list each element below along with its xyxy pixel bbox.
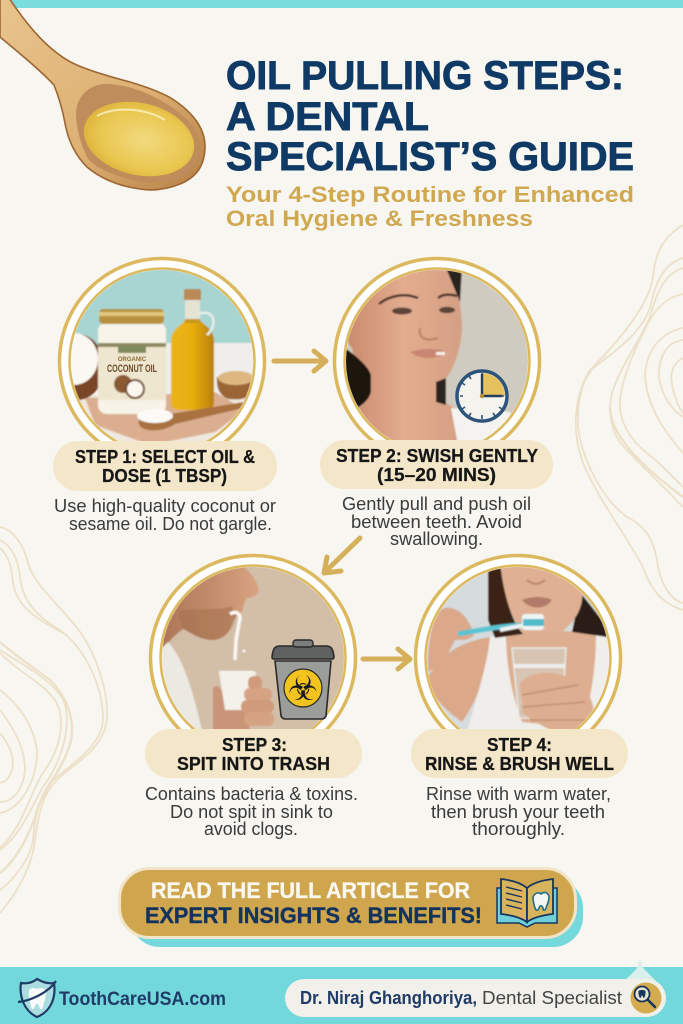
subtitle: Oral Hygiene & Freshness: [226, 206, 533, 231]
arrow: step 3 to step 4: [363, 649, 410, 669]
title: OIL PULLING STEPS:: [226, 54, 624, 98]
icon: biohazard trash bin: ☣: [288, 669, 318, 709]
photo: woman swishing with clock: [346, 270, 528, 440]
step 4 description: [426, 784, 611, 839]
step 3 label pill: STEP 3:: [222, 735, 287, 755]
step 1 description: sesame oil. Do not gargle.: [69, 514, 272, 534]
step 1 description: Use high-quality coconut or: [54, 496, 276, 516]
title: [226, 54, 634, 179]
step 3 description: avoid clogs.: [204, 819, 298, 839]
photo: woman brushing with glass of water: [427, 567, 607, 729]
icon: shield logo with tooth: [18, 979, 56, 1017]
step 1 label pill: STEP 1: SELECT OIL &: [75, 447, 255, 467]
step 4 description: Rinse with warm water,: [426, 784, 611, 804]
icon: clock: [457, 371, 507, 421]
site name: ToothCareUSA.com: [59, 988, 226, 1010]
photo: coconut oil jar and oil bottle: [74, 270, 252, 441]
panel: step 1: [50, 258, 277, 534]
arrow: step 2 to step 3: [324, 538, 360, 573]
step 1 label pill: DOSE (1 TBSP): [102, 466, 227, 486]
jar label text: COCONUT OIL: [107, 363, 157, 375]
subtitle: Your 4-Step Routine for Enhanced: [226, 182, 634, 207]
title: SPECIALIST’S GUIDE: [226, 135, 634, 179]
step 3 label pill: SPIT INTO TRASH: [177, 754, 330, 774]
footer bar: [0, 958, 683, 1024]
step 1 description: [54, 496, 276, 534]
title: A DENTAL: [226, 95, 429, 139]
step 2 label pill: (15–20 MINS): [377, 465, 496, 485]
photo: man spitting into cup: [162, 567, 344, 729]
step 4 description: then brush your teeth: [431, 802, 605, 822]
icon: magnifier with tooth: [630, 982, 662, 1014]
step 2 description: between teeth. Avoid: [351, 512, 522, 532]
icon: wooden spoon with oil: [0, 0, 205, 190]
step 4 label pill: RINSE & BRUSH WELL: [425, 754, 614, 774]
step 4 label pill: STEP 4:: [487, 735, 552, 755]
step 3 description: Do not spit in sink to: [170, 802, 333, 822]
call to action button: EXPERT INSIGHTS & BENEFITS!: [145, 903, 482, 928]
call to action button: [120, 868, 583, 947]
step 2 label pill: [320, 440, 553, 489]
panel: step 4: [411, 556, 628, 839]
step 3 description: Contains bacteria & toxins.: [145, 784, 358, 804]
step 2 description: swallowing.: [390, 529, 483, 549]
jar label text: ORGANIC: [118, 357, 147, 363]
author badge: Dental Specialist: [482, 988, 622, 1008]
jar label text: [107, 356, 157, 372]
step 3 label pill: [145, 729, 362, 778]
arrow: step 1 to step 2: [274, 351, 326, 371]
step 2 description: Gently pull and push oil: [342, 494, 531, 514]
subtitle: [226, 182, 634, 231]
panel: step 3: [145, 556, 362, 839]
call to action button: READ THE FULL ARTICLE FOR: [151, 878, 470, 903]
icon: biohazard trash bin: [272, 640, 334, 719]
author badge: [285, 979, 666, 1017]
author badge: Dr. Niraj Ghanghoriya,: [300, 988, 477, 1008]
step 4 description: thoroughly.: [472, 819, 565, 839]
step 4 label pill: [411, 729, 628, 778]
icon: open book with tooth: [497, 879, 557, 927]
panel: step 2: [320, 258, 553, 549]
step 2 label pill: STEP 2: SWISH GENTLY: [336, 446, 538, 466]
step 2 description: [342, 494, 531, 549]
step 1 label pill: [53, 441, 277, 491]
step 3 description: [145, 784, 358, 839]
